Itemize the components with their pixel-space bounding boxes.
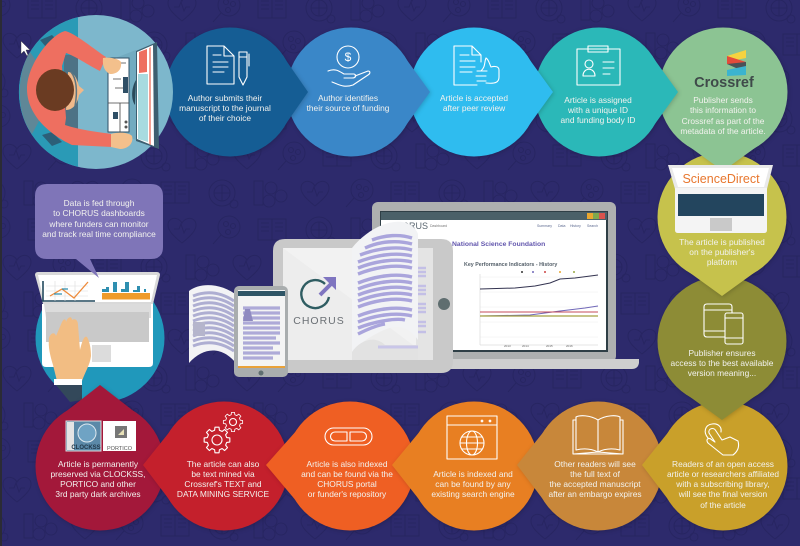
step: search engine [392,402,538,530]
icon: pointing hand [705,424,739,455]
shirt [27,31,112,147]
step: final version: with a subscribing library, [675,479,770,489]
step: archived: PORTICO and other [60,479,136,489]
cursor [21,41,30,56]
step: archived: Article is permanently [58,459,139,469]
line chart: 2015 [546,344,553,348]
step: submits manuscript: of their choice [199,113,251,123]
laptop: CHORUS dashboard [372,202,616,362]
laptop: ScienceDirect: ScienceDirect [682,172,760,186]
dashboard header: Dashboard [430,224,447,228]
step: published on platform: The article is published [679,237,765,247]
step: text mining: be text mined via [191,469,255,479]
dashboard title: National Science Foundation [452,241,545,248]
step: final version: of the article [700,500,746,510]
step: published on platform: platform [707,257,737,267]
icon: gears [204,412,243,453]
icon: hand with coin [328,46,370,86]
step: archived [36,385,164,530]
step: source of funding [286,28,430,156]
step: text mining: The article can also [187,459,260,469]
dashboard header: Search [587,224,598,228]
step: CHORUS portal [266,402,414,530]
laptop dashboard screen [35,272,160,304]
open book: left page [189,285,238,366]
step: archived: 3rd party dark archives [55,489,141,499]
tablet with CHORUS logo [273,239,453,373]
step: unique ID: with a unique ID [567,105,628,115]
step: search engine: existing search engine [431,489,515,499]
speech bubble: dashboards: where funders can monitor [48,219,149,229]
step: final version [642,402,788,530]
dashboard header: Summary [537,224,552,228]
step: best available version: Publisher ensures [688,348,756,358]
phone [234,286,288,377]
laptop base [300,359,639,369]
dashboard header [389,221,598,231]
icon: browser with globe [447,416,497,459]
step: best available version: version meaning... [688,368,756,378]
speech bubble: dashboards: and track real time compliance [42,229,156,239]
logo: CHORUS: CHORUS [293,315,345,327]
open book: right page [352,222,418,360]
step: text mining: Crossref's TEXT and [184,479,262,489]
line chart: 2014 [522,344,529,348]
step: unique ID: and funding body ID [561,115,635,125]
icon: ID badge [577,46,620,85]
speech bubble: dashboards [35,184,163,278]
dashboard header: Data [558,224,565,228]
step: Crossref [658,28,788,171]
hair and face [36,69,84,111]
line chart: 2013 [504,344,511,348]
step: text mining [143,402,288,530]
step: embargo: the accepted manuscript [549,479,641,489]
step: CHORUS portal: Article is also indexed [306,459,388,469]
speech bubble: dashboards: Data is fed through [64,198,135,208]
speech bubble: dashboards: to CHORUS dashboards [53,208,145,218]
icon: document and pen [207,46,249,85]
step: best available version: access to the best available [671,358,774,368]
line chart [480,271,598,348]
step: peer review [410,28,553,156]
step: text mining: DATA MINING SERVICE [177,489,269,499]
laptop body [42,304,153,367]
dashboard header: History [570,224,581,228]
step: submits manuscript: manuscript to the journal [179,103,271,113]
logo: CLOCKSS: CLOCKSS [71,445,101,451]
step: final version: will see the final version [678,489,768,499]
logo: CHORUS [293,277,345,327]
step: submits manuscript [166,28,308,156]
step: search engine: Article is indexed and [433,469,513,479]
line chart: 2016 [566,344,573,348]
logo: PORTICO: PORTICO [107,446,133,452]
panel: teal circle with laptop and hand [35,272,164,402]
step: published on platform: on the publisher's [689,247,755,257]
step: source of funding: Author identifies [318,93,378,103]
step: Crossref: Crossref as part of the [682,116,765,126]
step: peer review: Article is accepted [440,93,508,103]
step: CHORUS portal: CHORUS portal [317,479,377,489]
icon: hand on keyboard [49,317,91,402]
step: final version: Readers of an open access [672,459,774,469]
logo: PORTICO [103,421,136,452]
icon: tablet and phone [704,304,743,344]
step: source of funding: their source of funding [307,103,390,113]
step: embargo: the full text of [570,469,621,479]
laptop: ScienceDirect [668,165,773,233]
illustration: author at desk [19,15,173,169]
step: unique ID: Article is assigned [564,95,632,105]
logo: Crossref: Crossref [694,75,754,91]
step: search engine: can be found by any [435,479,512,489]
step: Crossref: Publisher sends [693,95,753,105]
step: embargo: after an embargo expires [548,489,642,499]
logo: Crossref [694,50,754,91]
icon: chain link [325,428,372,445]
step: best available version [658,276,786,420]
chart title: Key Performance Indicators - History [464,262,557,268]
step: CHORUS portal: and can be found via the [301,469,393,479]
step: CHORUS portal: or funder's repository [308,489,387,499]
step: Crossref: metadata of the article. [680,126,766,136]
step: embargo: Other readers will see [554,459,636,469]
icon: hand with coin: $ [345,50,352,64]
step: embargo [517,402,662,530]
logo: CLOCKSS [66,421,101,451]
step: published on platform [658,152,786,296]
step: final version: article or researchers affiliated [667,469,779,479]
icon: open book [573,416,623,454]
dashboard header: CHORUS [389,221,428,231]
monitor [132,42,159,149]
step: unique ID [534,28,678,156]
step: Crossref: this information to [690,105,756,115]
icon: document with thumbs up [454,46,499,85]
step: peer review: after peer review [443,103,506,113]
keyboard [108,58,129,132]
step: archived: preserved via CLOCKSS, [51,469,145,479]
step: submits manuscript: Author submits their [188,93,262,103]
hands [103,58,132,149]
